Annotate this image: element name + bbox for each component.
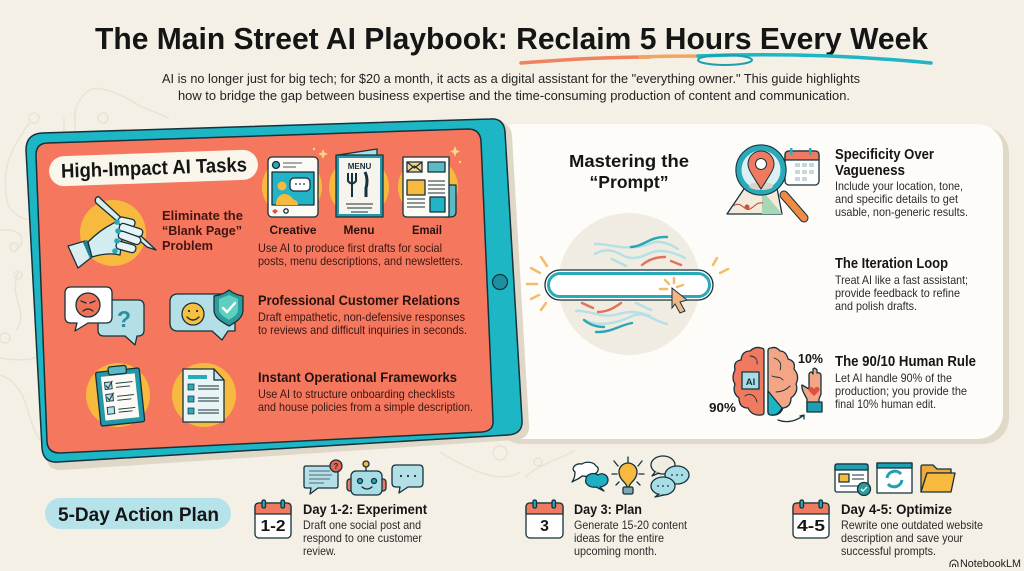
icon: smile bubble and check shield xyxy=(170,290,243,340)
text: day 3 plan: upcoming month. xyxy=(574,544,657,558)
text: day 1-2 experiment xyxy=(303,502,427,558)
icons: chat, robot and message bubble: ? xyxy=(334,462,339,471)
text: professional customer relations: Professional Customer Relations xyxy=(258,292,460,308)
heading: mastering the prompt xyxy=(569,151,689,192)
text: professional customer relations: Draft empathetic, non-defensive responses xyxy=(258,310,465,324)
notebooklm watermark: NotebookLM xyxy=(960,558,1021,570)
text: instant operational frameworks: Instant Operational Frameworks xyxy=(258,369,457,385)
text: day 3 plan: ideas for the entire xyxy=(574,531,664,545)
panel: mastering the prompt xyxy=(490,124,1009,444)
step: day 3 plan xyxy=(526,456,689,558)
icon: robot hand writing xyxy=(68,197,156,268)
icons: thought clouds, light bulb and speech bubbles xyxy=(572,456,689,497)
heading: high-impact AI tasks: High-Impact AI Tasks xyxy=(61,154,247,183)
label: 10 percent: 10% xyxy=(798,352,823,366)
description: first drafts: Use AI to produce first drafts for social xyxy=(258,241,442,255)
labels: creative, menu, email: Email xyxy=(412,223,442,237)
illustration: prompt bar xyxy=(527,213,728,355)
text: the 90/10 human rule: production; you provide the xyxy=(835,384,967,398)
icons: web page, refresh window and folder xyxy=(835,463,955,496)
text: specificity over vagueness: Include your location, tone, xyxy=(835,179,963,193)
icon: social creative card xyxy=(262,157,322,217)
text: instant operational frameworks: and house policies from a simple description. xyxy=(258,400,473,414)
heading: mastering the prompt: Mastering the xyxy=(569,151,689,171)
tip: specificity over vagueness xyxy=(727,145,968,219)
description: first drafts xyxy=(258,241,463,268)
text: specificity over vagueness xyxy=(835,147,968,219)
text: professional customer relations: to reviews and difficult inquiries in seconds. xyxy=(258,323,467,337)
text: day 4-5 optimize: description and save your xyxy=(841,531,963,545)
panel: high-impact AI tasks tablet xyxy=(26,119,529,470)
text: instant operational frameworks: Use AI to structure onboarding checklists xyxy=(258,387,455,401)
icon: brain with 90 and 10 percent split: AI xyxy=(746,377,755,388)
text: eliminate the blank page problem: “Blank Page” xyxy=(162,224,242,238)
task: professional customer relations xyxy=(65,287,467,345)
text: eliminate the blank page problem: Eliminate the xyxy=(162,209,243,223)
text: the 90/10 human rule: Let AI handle 90% of the xyxy=(835,371,952,385)
icon: brain with 90 and 10 percent split xyxy=(733,347,822,422)
text: day 1-2 experiment: review. xyxy=(303,544,336,558)
text: day 4-5 optimize: Day 4-5: Optimize xyxy=(841,502,952,517)
icon: location magnifier with map and calendar xyxy=(727,145,819,218)
heading: mastering the prompt: “Prompt” xyxy=(590,172,668,192)
text: day 4-5 optimize xyxy=(841,502,983,558)
task: instant operational frameworks xyxy=(86,363,473,427)
icon: calendar 1-2: 1-2 xyxy=(260,518,286,535)
icon: house policy document xyxy=(172,363,236,427)
title: The Main Street AI Playbook: Reclaim 5 Hours Every Week xyxy=(95,21,929,56)
labels: creative, menu, email: Creative xyxy=(270,223,317,237)
label: 90 percent: 90% xyxy=(709,401,736,415)
intro text: AI is no longer just for big tech; for $20 a month, it acts as a digital assistant for the "everything owner." This guide highlights xyxy=(162,71,860,86)
section: 5-day action plan xyxy=(45,456,983,558)
text: the 90/10 human rule: The 90/10 Human Rule xyxy=(835,354,976,370)
title underline swoosh xyxy=(521,55,931,65)
icon: email newsletter xyxy=(398,157,458,217)
text: day 3 plan: Day 3: Plan xyxy=(574,502,642,517)
text: professional customer relations xyxy=(258,292,467,337)
description: first drafts: posts, menu descriptions, and newsletters. xyxy=(258,254,463,268)
labels: creative, menu, email xyxy=(270,223,442,237)
text: day 1-2 experiment: respond to one customer xyxy=(303,531,422,545)
tip: the iteration loop: Treat AI like a fast assistant; xyxy=(835,273,968,287)
intro text: how to bridge the gap between business expertise and the time-consuming production of content and communication. xyxy=(178,88,850,103)
text: specificity over vagueness: usable, non-generic results. xyxy=(835,205,968,219)
icon: restaurant menu: MENU xyxy=(348,162,371,171)
text: instant operational frameworks xyxy=(258,369,473,414)
text: eliminate the blank page problem: Problem xyxy=(162,239,213,253)
step: day 1-2 experiment xyxy=(255,460,427,558)
text: specificity over vagueness: Specificity Over xyxy=(835,147,934,163)
icon: angry and question speech bubbles: ? xyxy=(117,306,131,332)
tablet camera button xyxy=(492,274,508,290)
sparkles xyxy=(313,146,461,163)
tip: the iteration loop: The Iteration Loop xyxy=(835,256,948,272)
text: day 4-5 optimize: successful prompts. xyxy=(841,544,936,558)
text: the 90/10 human rule: final 10% human edit. xyxy=(835,397,936,411)
intro text xyxy=(162,71,860,103)
icons: chat, robot and message bubble xyxy=(304,460,423,495)
text: day 1-2 experiment: Draft one social post and xyxy=(303,518,421,532)
text: day 4-5 optimize: Rewrite one outdated website xyxy=(841,518,983,532)
labels: creative, menu, email: Menu xyxy=(344,223,374,237)
icon: calendar 4-5: 4-5 xyxy=(797,518,825,535)
text: day 3 plan xyxy=(574,502,688,558)
tip: the iteration loop xyxy=(835,256,968,313)
icon: calendar 3: 3 xyxy=(540,518,549,535)
icon: angry and question speech bubbles xyxy=(65,287,144,345)
icon: onboarding checklist clipboard xyxy=(86,363,150,427)
heading: 5-day action plan: 5-Day Action Plan xyxy=(58,505,219,526)
step: day 4-5 optimize xyxy=(793,463,983,558)
text: specificity over vagueness: Vagueness xyxy=(835,163,905,179)
icon: calendar 3 xyxy=(526,500,563,538)
tip: the iteration loop: provide feedback to refine xyxy=(835,286,960,300)
icon: calendar 4-5 xyxy=(793,500,829,538)
text: eliminate the blank page problem xyxy=(162,209,243,253)
text: specificity over vagueness: and specific details to get xyxy=(835,192,959,206)
text: day 1-2 experiment: Day 1-2: Experiment xyxy=(303,502,427,517)
icon: restaurant menu xyxy=(329,149,389,217)
tip: the 90/10 human rule xyxy=(709,347,976,422)
task: eliminate the blank page problem xyxy=(68,146,463,268)
heading: 5-day action plan xyxy=(45,498,231,529)
icon: calendar 1-2 xyxy=(255,500,291,538)
text: day 3 plan: Generate 15-20 content xyxy=(574,518,688,532)
text: the 90/10 human rule xyxy=(835,354,976,411)
tip: the iteration loop: and polish drafts. xyxy=(835,299,917,313)
